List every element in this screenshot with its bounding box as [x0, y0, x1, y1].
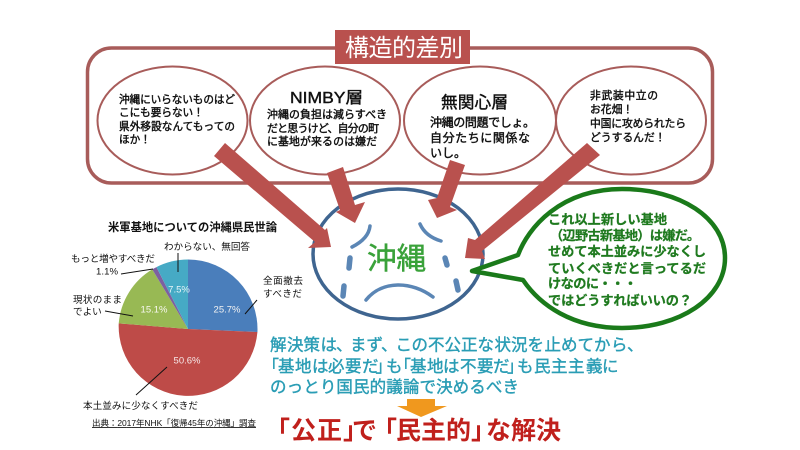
speech bubble: okinawa voice: これ以上新しい基地 [548, 211, 667, 227]
pie slices [119, 260, 257, 396]
speech ellipse: NIMBY: NIMBY層 [290, 90, 363, 107]
arrow: to okinawa from left ellipse [214, 143, 331, 248]
category labels: 1.1% [96, 266, 118, 278]
solution text: 「基地は必要だ」も「基地は不要だ」も民主主義に [262, 357, 618, 376]
speech bubble: okinawa voice: せめて本土並みに少なくし [548, 243, 706, 259]
speech bubble: okinawa voice [472, 189, 725, 328]
category labels: でよい [73, 307, 102, 318]
speech bubble: okinawa voice: ていくべきだと言ってるだ [548, 261, 706, 276]
arrow: neutrality to okinawa [465, 143, 600, 259]
speech bubble: okinawa voice: ではどうすればいいの？ [548, 293, 692, 308]
solution text: 解決策は、まず、この不公正な状況を止めてから、 [270, 336, 644, 354]
speech ellipse: NIMBY: に基地が来るのは嫌だ [267, 134, 377, 148]
percentages: 50.6% [174, 356, 201, 366]
solution text [262, 336, 644, 396]
pie chart: opinion poll [71, 220, 303, 428]
face marks [343, 224, 458, 300]
arrow: NIMBY to okinawa [327, 167, 365, 223]
panel: structural discrimination [88, 30, 712, 183]
heading: 構造的差別: 構造的差別 [345, 35, 463, 62]
category labels: 本土並みに少なくすべきだ [83, 400, 198, 412]
speech ellipse: indifferent: 沖縄の問題でしょ。 [430, 116, 535, 130]
speech ellipse: indifferent: 自分たちに関係な [430, 131, 530, 145]
speech ellipse: no relocation: 県外移設なんてもっての [119, 120, 235, 133]
conclusion: 「公正」で「民主的」な解決 [265, 417, 561, 445]
speech ellipse: indifferent: いし。 [430, 146, 466, 160]
category labels: すべきだ [263, 289, 302, 300]
arrow: down to conclusion [397, 399, 447, 417]
heading: 構造的差別 [335, 30, 470, 64]
speech ellipse: disarmed neutrality [556, 66, 706, 174]
speech ellipse: indifferent [404, 66, 556, 174]
speech ellipse: indifferent: 無関心層 [441, 93, 508, 112]
category labels: 現状のまま [73, 294, 122, 306]
speech ellipse: disarmed neutrality: お花畑！ [590, 103, 633, 116]
speech ellipse: no relocation: ほか！ [119, 134, 151, 146]
percentages: 7.5% [168, 284, 190, 296]
percentages: 15.1% [141, 304, 168, 316]
speech ellipse: NIMBY: 沖縄の負担は減らすべき [267, 107, 387, 121]
arrow: indifferent to okinawa [428, 160, 465, 218]
category labels [71, 241, 303, 412]
percentages: 25.7% [214, 304, 241, 316]
speech ellipse: no relocation [98, 66, 248, 174]
speech ellipse: no relocation: こにも要らない！ [119, 107, 204, 119]
speech ellipse: disarmed neutrality: どうするんだ！ [590, 131, 666, 144]
speech bubble: okinawa voice: けなのに・・・ [548, 276, 637, 291]
speech ellipse: no relocation: 沖縄にいらないものはど [119, 93, 235, 106]
category labels: わからない、無回答 [164, 241, 250, 253]
source note: 出典：2017年NHK「復帰45年の沖縄」調査 [92, 418, 256, 428]
category labels: 全面撤去 [263, 275, 303, 287]
speech ellipse: disarmed neutrality: 中国に攻められたら [590, 116, 686, 130]
category labels: もっと増やすべきだ [71, 253, 155, 265]
speech bubble: okinawa voice: （辺野古新基地）は嫌だ。 [550, 227, 700, 243]
chart title: 米軍基地についての沖縄県民世論 [108, 220, 278, 234]
solution text: のっとり国民的議論で決めるべき [270, 378, 519, 396]
label: 沖縄: 沖縄 [367, 243, 426, 276]
okinawa face [313, 189, 483, 319]
speech ellipse: NIMBY: だと思うけど、自分の町 [267, 122, 379, 135]
percentages [141, 284, 241, 366]
speech ellipse: disarmed neutrality: 非武装中立の [590, 88, 658, 102]
speech ellipse: NIMBY [250, 66, 400, 174]
leader lines [105, 253, 257, 395]
